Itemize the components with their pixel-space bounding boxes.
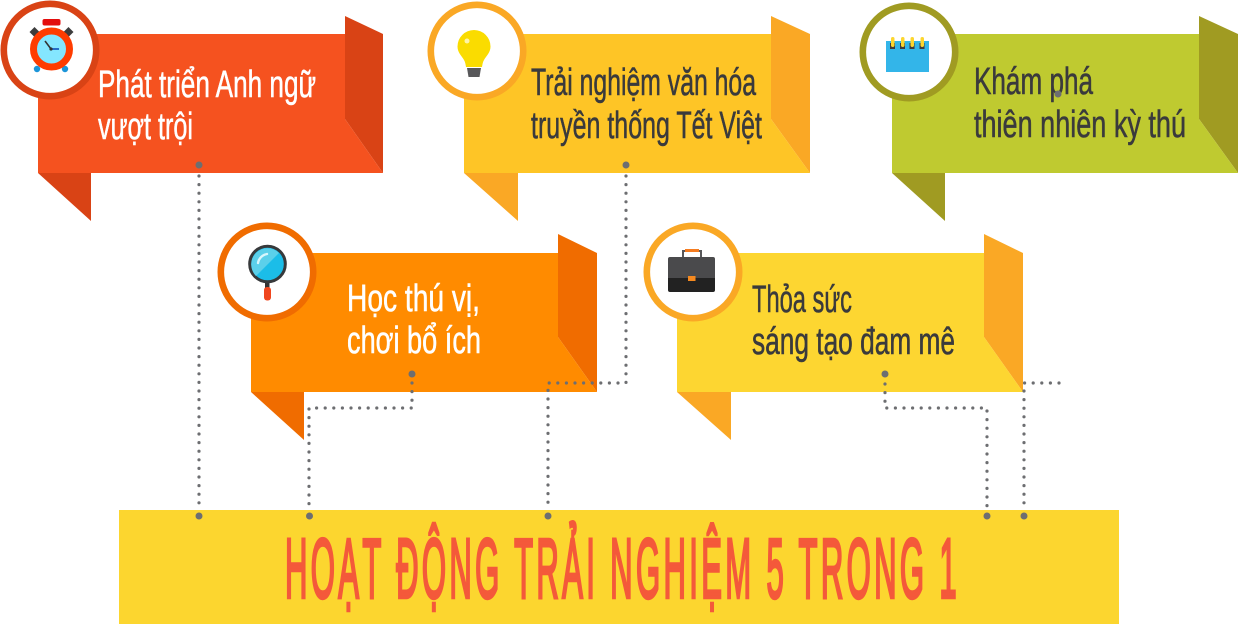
text: Khám phá thiên nhiên kỳ thú: Khám phá xyxy=(974,61,1094,103)
text: Học thú vị, chơi bổ ích: Học thú vị, xyxy=(347,278,480,320)
banner: Phát triển Anh ngữ xyxy=(4,4,383,221)
text: Khám phá thiên nhiên kỳ thú xyxy=(974,61,1186,146)
text: Trải nghiệm văn hóa truyền thống Tết Việt: truyền thống Tết Việt xyxy=(531,105,762,147)
icon: light bulb xyxy=(458,30,490,77)
title banner xyxy=(119,510,1119,624)
icon: notebook xyxy=(886,37,929,72)
icon: magnifying glass xyxy=(250,246,285,300)
banner: Học thú vị xyxy=(221,226,597,440)
text: Phát triển Anh ngữ vượt trội xyxy=(98,64,316,148)
text: Trải nghiệm văn hóa truyền thống Tết Việt: Trải nghiệm văn hóa xyxy=(531,62,757,104)
text: Học thú vị, chơi bổ ích: chơi bổ ích xyxy=(347,320,481,362)
connector: Trải nghiệm văn hóa to title xyxy=(544,162,630,520)
text: Thỏa sức sáng tạo đam mê xyxy=(752,279,955,363)
banner: Thỏa sức sáng tạo xyxy=(647,226,1023,440)
icon: alarm clock xyxy=(30,19,74,72)
text: Phát triển Anh ngữ vượt trội: vượt trội xyxy=(98,106,193,148)
text: Thỏa sức sáng tạo đam mê: Thỏa sức xyxy=(752,279,852,321)
icon: briefcase xyxy=(668,249,715,292)
connector: Phát triển Anh ngữ to title xyxy=(196,162,202,520)
text: Thỏa sức sáng tạo đam mê: sáng tạo đam mê xyxy=(752,321,955,363)
banner: Trải nghiệm văn hóa xyxy=(431,5,810,221)
text: Trải nghiệm văn hóa truyền thống Tết Việt xyxy=(531,62,762,147)
connector: Thỏa sức to title xyxy=(882,370,990,520)
text: Phát triển Anh ngữ vượt trội: Phát triển Anh ngữ xyxy=(98,64,316,106)
connector: Học thú vị to title xyxy=(306,370,416,520)
banner: Khám phá thiên nhiên xyxy=(863,6,1238,221)
connector: Khám phá to title xyxy=(1020,90,1062,520)
text: Học thú vị, chơi bổ ích xyxy=(347,278,481,362)
